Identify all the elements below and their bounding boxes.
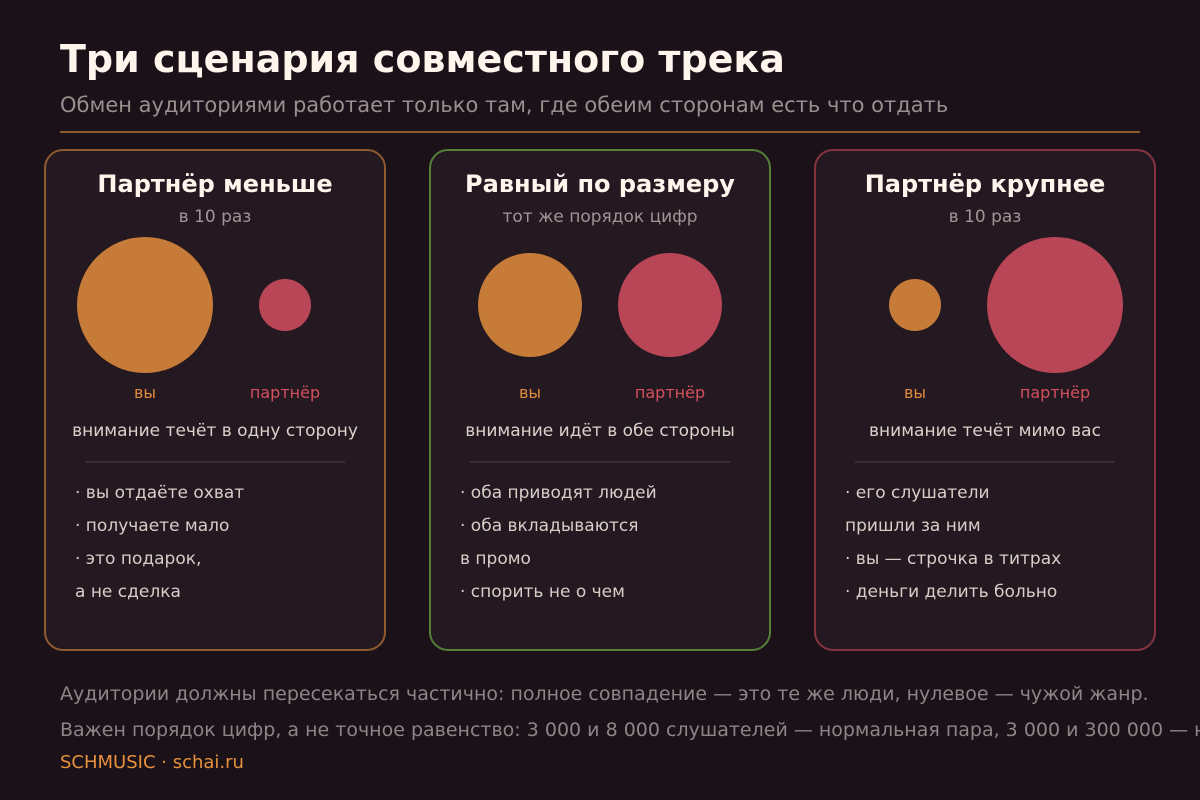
bullet list bbox=[845, 483, 1061, 602]
bullet list: · это подарок, bbox=[75, 549, 201, 569]
bullet list: · спорить не о чем bbox=[460, 582, 625, 602]
circle: partner bbox=[987, 237, 1123, 373]
heading: equal size: Равный по размеру bbox=[465, 170, 735, 198]
label: partner: партнёр bbox=[635, 383, 705, 402]
bullet list: а не сделка bbox=[75, 582, 181, 602]
bullet list: · вы отдаёте охват bbox=[75, 483, 244, 503]
ratio label: тот же порядок цифр bbox=[502, 207, 698, 227]
footnote line 1: Аудитории должны пересекаться частично: полное совпадение — это те же люди, нулевое — чужой жанр. bbox=[60, 683, 1149, 705]
panel: partner smaller bbox=[45, 150, 385, 650]
bullet list bbox=[75, 483, 244, 602]
label: you: вы bbox=[134, 383, 156, 402]
circle: partner bbox=[259, 279, 311, 331]
attention flow note: внимание идёт в обе стороны bbox=[465, 421, 735, 441]
circle: you bbox=[889, 279, 941, 331]
label: you: вы bbox=[519, 383, 541, 402]
subtitle: Обмен аудиториями работает только там, где обеим сторонам есть что отдать bbox=[60, 93, 948, 117]
bullet list: · оба приводят людей bbox=[460, 483, 657, 503]
label: partner: партнёр bbox=[1020, 383, 1090, 402]
bullet list: · оба вкладываются bbox=[460, 516, 638, 536]
ratio label: в 10 раз bbox=[179, 207, 251, 227]
heading: partner larger: Партнёр крупнее bbox=[865, 170, 1105, 198]
attention flow note: внимание течёт мимо вас bbox=[869, 421, 1101, 441]
label: partner: партнёр bbox=[250, 383, 320, 402]
title: Три сценария совместного трека bbox=[60, 37, 785, 81]
bullet list: · получаете мало bbox=[75, 516, 229, 536]
heading: partner smaller: Партнёр меньше bbox=[97, 170, 333, 198]
bullet list: · вы — строчка в титрах bbox=[845, 549, 1061, 569]
bullet list bbox=[460, 483, 657, 602]
attention flow note: внимание течёт в одну сторону bbox=[72, 421, 358, 441]
panel: partner larger bbox=[815, 150, 1155, 650]
ratio label: в 10 раз bbox=[949, 207, 1021, 227]
circle: you bbox=[77, 237, 213, 373]
panel: equal size bbox=[430, 150, 770, 650]
circle: partner bbox=[618, 253, 722, 357]
circle: you bbox=[478, 253, 582, 357]
bullet list: · деньги делить больно bbox=[845, 582, 1057, 602]
bullet list: · его слушатели bbox=[845, 483, 990, 503]
bullet list: в промо bbox=[460, 549, 531, 569]
bullet list: пришли за ним bbox=[845, 516, 981, 536]
brand credit: SCHMUSIC · schai.ru bbox=[60, 752, 244, 773]
label: you: вы bbox=[904, 383, 926, 402]
